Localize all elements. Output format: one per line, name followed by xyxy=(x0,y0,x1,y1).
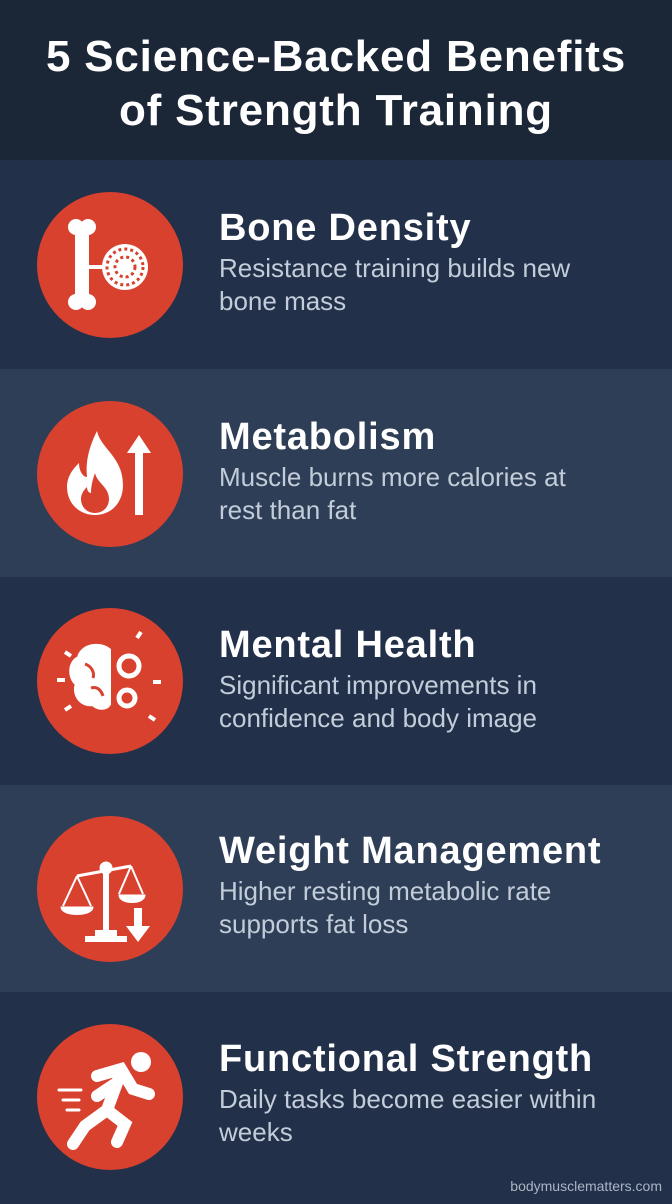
text: bone density xyxy=(219,207,570,316)
icon: scale with down arrow xyxy=(37,816,183,962)
text: bone density: Bone Density xyxy=(219,207,471,249)
icon: flame with arrow xyxy=(37,401,183,547)
text: bone density: Resistance training builds new bone mass xyxy=(219,253,570,316)
text: functional strength xyxy=(219,1038,596,1147)
text: mental health: confidence and body image xyxy=(219,703,537,733)
text: functional strength: weeks xyxy=(219,1117,293,1147)
panel: functional strength xyxy=(0,992,672,1204)
text: mental health xyxy=(219,624,537,733)
title: of Strength Training xyxy=(119,86,553,135)
icon: runner xyxy=(37,1024,183,1170)
text: metabolism: Metabolism xyxy=(219,416,436,458)
footer: source: bodymusclematters.com xyxy=(510,1178,662,1194)
icon: brain with gears xyxy=(37,608,183,754)
text: weight management xyxy=(219,830,601,939)
text: metabolism: Muscle burns more calories at xyxy=(219,462,566,492)
panel: mental health xyxy=(0,577,672,785)
text: mental health: Significant improvements in xyxy=(219,670,537,700)
panel: bone density xyxy=(0,160,672,369)
panel: weight management xyxy=(0,785,672,992)
text: mental health: Mental Health xyxy=(219,624,476,666)
text: metabolism xyxy=(219,416,566,525)
text: weight management: Weight Management xyxy=(219,830,601,872)
text: functional strength: Functional Strength xyxy=(219,1038,593,1080)
text: metabolism: rest than fat xyxy=(219,495,356,525)
text: weight management: Higher resting metabolic rate xyxy=(219,876,551,906)
icon: bone xyxy=(37,192,183,338)
panel: metabolism xyxy=(0,369,672,577)
text: weight management: supports fat loss xyxy=(219,909,408,939)
title: 5 Science-Backed Benefits xyxy=(46,32,626,81)
title xyxy=(0,0,672,160)
text: functional strength: Daily tasks become easier within xyxy=(219,1084,596,1114)
